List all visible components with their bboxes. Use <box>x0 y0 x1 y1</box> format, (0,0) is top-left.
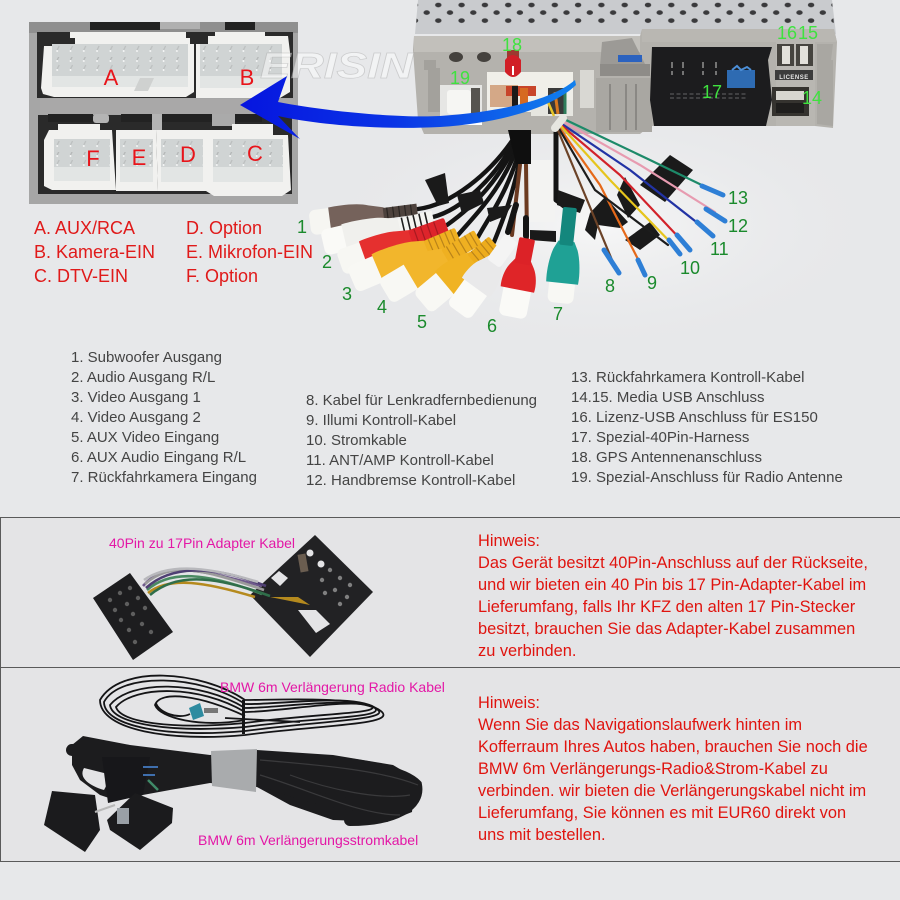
numbered labels 14-19: 15 <box>798 23 818 43</box>
parts list column 3: 17. Spezial-40Pin-Harness <box>571 429 749 446</box>
numbered labels 14-19: 19 <box>450 68 470 88</box>
left cable bundle <box>418 125 570 242</box>
connector legend <box>34 218 313 286</box>
numbered labels 14-19: 14 <box>802 88 822 108</box>
parts list column 2: 11. ANT/AMP Kontroll-Kabel <box>306 452 494 469</box>
light floor reflection <box>300 90 900 360</box>
numbered labels 14-19 <box>450 23 822 108</box>
watermark: ERISIN <box>260 45 414 86</box>
silver tape band <box>211 749 257 792</box>
connector E letter: E <box>132 145 146 170</box>
panel: 40-pin adapter <box>0 518 900 668</box>
numbered labels 1-13: 2 <box>322 252 332 272</box>
head unit rear <box>413 0 837 134</box>
connector legend: E. Mikrofon-EIN <box>186 242 313 262</box>
RCA 4 yellow <box>346 220 464 295</box>
hint text 2: verbinden. wir bieten die Verlängerungskabel nicht im <box>478 782 866 800</box>
connector A <box>41 32 194 97</box>
connector legend: B. Kamera-EIN <box>34 242 155 262</box>
radio extension cable image <box>100 676 383 737</box>
hint text 2 <box>478 694 868 844</box>
adapter caption: 40Pin zu 17Pin Adapter Kabel <box>109 535 295 551</box>
parts list column 1: 4. Video Ausgang 2 <box>71 409 201 426</box>
numbered labels 1-13: 3 <box>342 284 352 304</box>
parts list column 1 <box>71 349 257 486</box>
parts list column 2: 10. Stromkable <box>306 432 407 449</box>
connector E <box>116 130 158 191</box>
numbered labels 14-19: 18 <box>502 35 522 55</box>
hint text 1: Hinweis: <box>478 532 540 550</box>
numbered labels 1-13: 5 <box>417 312 427 332</box>
USB ports <box>772 42 815 126</box>
numbered labels 1-13: 6 <box>487 316 497 336</box>
numbered labels 14-19: 17 <box>702 82 722 102</box>
connector A letter: A <box>104 65 119 90</box>
connector C <box>206 124 291 196</box>
parts list column 3 <box>571 369 843 486</box>
numbered labels 1-13: 13 <box>728 188 748 208</box>
hint text 2: Hinweis: <box>478 694 540 712</box>
parts list column 3: 13. Rückfahrkamera Kontroll-Kabel <box>571 369 804 386</box>
hint text 2: BMW 6m Verlängerungs-Radio&Strom-Kabel zu <box>478 760 828 778</box>
numbered labels 1-13: 1 <box>297 217 307 237</box>
parts list column 1: 2. Audio Ausgang R/L <box>71 369 215 386</box>
power extension cable image <box>72 736 418 822</box>
connector B <box>196 32 290 98</box>
parts list column 1: 5. AUX Video Eingang <box>71 429 219 446</box>
adapter cable image <box>93 535 373 660</box>
parts list column 3: 14.15. Media USB Anschluss <box>571 389 764 406</box>
parts list column 1: 3. Video Ausgang 1 <box>71 389 201 406</box>
RCA 6 yellow <box>412 230 504 315</box>
connector legend: F. Option <box>186 266 258 286</box>
connector D letter: D <box>180 142 196 167</box>
GPS antenna connector <box>505 50 521 77</box>
connector D <box>156 130 206 191</box>
hint text 2: uns mit bestellen. <box>478 826 606 844</box>
panel: BMW extension cables <box>0 668 900 862</box>
numbered labels 1-13: 4 <box>377 297 387 317</box>
radio antenna plug <box>189 703 218 720</box>
wiring connector block <box>487 70 594 116</box>
hint text 1: Lieferumfang, falls Ihr KFZ den alten 17 Pin-Stecker <box>478 598 856 616</box>
parts list column 2: 8. Kabel für Lenkradfernbedienung <box>306 392 537 409</box>
parts list column 1: 1. Subwoofer Ausgang <box>71 349 222 366</box>
RCA 5 yellow <box>377 223 486 306</box>
parts list column 2: 12. Handbremse Kontroll-Kabel <box>306 472 515 489</box>
RCA 1 brown <box>308 196 419 236</box>
RCA 2 white <box>320 204 436 257</box>
numbered labels 14-19: 16 <box>777 23 797 43</box>
hint text 1: besitzt, brauchen Sie das Adapter-Kabel zusammen <box>478 620 855 638</box>
pale plastic behind cables <box>530 160 555 222</box>
parts list column 3: 18. GPS Antennenanschluss <box>571 449 762 466</box>
numbered labels 1-13: 11 <box>710 239 729 259</box>
connector legend: D. Option <box>186 218 262 238</box>
parts list column 1: 7. Rückfahrkamera Eingang <box>71 469 257 486</box>
RCA 8 red <box>495 235 544 320</box>
numbered labels 1-13: 7 <box>553 304 563 324</box>
connector F <box>44 124 116 190</box>
numbered labels 1-13: 8 <box>605 276 615 296</box>
hint text 1 <box>478 532 868 660</box>
control wires fan <box>555 118 725 275</box>
hint text 2: Wenn Sie das Navigationslaufwerk hinten im <box>478 716 802 734</box>
RCA 7 white <box>444 228 525 322</box>
license label: LICENSE <box>779 75 809 81</box>
connector legend: C. DTV-EIN <box>34 266 128 286</box>
parts list column 1: 6. AUX Audio Eingang R/L <box>71 449 246 466</box>
numbered labels 1-13 <box>297 188 748 336</box>
connector photo panel <box>29 22 298 204</box>
hint text 2: Lieferumfang, Sie können es mit EUR60 direkt von <box>478 804 846 822</box>
hint text 1: und wir bieten ein 40 Pin bis 17 Pin-Adapter-Kabel im <box>478 576 866 594</box>
wiring plugs <box>44 757 173 852</box>
parts list column 2 <box>306 392 537 489</box>
parts list column 3: 19. Spezial-Anschluss für Radio Antenne <box>571 469 843 486</box>
hint text 1: Das Gerät besitzt 40Pin-Anschluss auf der Rückseite, <box>478 554 868 572</box>
RCA 9 green <box>544 206 586 305</box>
hint text 2: Kofferraum Ihres Autos haben, brauchen Sie noch die <box>478 738 868 756</box>
connector F letter: F <box>86 146 100 171</box>
power cable caption: BMW 6m Verlängerungsstromkabel <box>198 832 418 848</box>
connector B letter: B <box>240 65 254 90</box>
numbered labels 1-13: 9 <box>647 273 657 293</box>
connector C letter: C <box>247 141 263 166</box>
blue wire tips <box>604 186 725 275</box>
40-pin socket <box>650 47 772 126</box>
cable tag black labels <box>425 155 693 250</box>
rear metal housing <box>413 29 837 134</box>
hint text 1: zu verbinden. <box>478 642 576 660</box>
RCA 3 red <box>335 212 451 277</box>
connector legend: A. AUX/RCA <box>34 218 135 238</box>
radio cable caption: BMW 6m Verlängerung Radio Kabel <box>220 679 445 695</box>
numbered labels 1-13: 10 <box>680 258 700 278</box>
perforated top plate <box>415 0 836 34</box>
blue arrow <box>240 76 576 139</box>
parts list column 3: 16. Lizenz-USB Anschluss für ES150 <box>571 409 818 426</box>
port 19 radio antenna socket <box>440 85 482 125</box>
parts list column 2: 9. Illumi Kontroll-Kabel <box>306 412 456 429</box>
numbered labels 1-13: 12 <box>728 216 748 236</box>
